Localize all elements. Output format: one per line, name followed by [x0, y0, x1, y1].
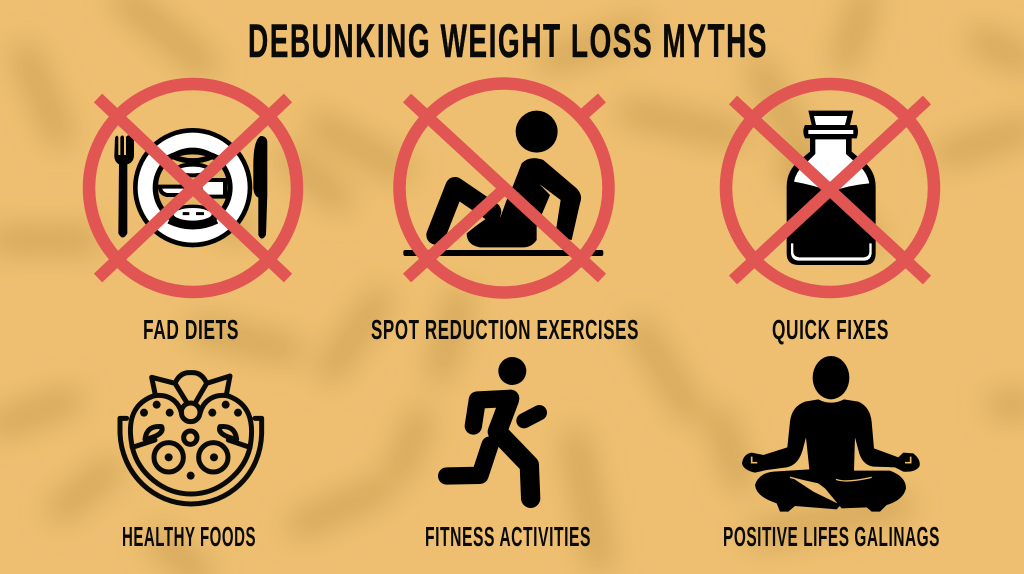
label: fitness activities: FITNESS ACTIVITIES [425, 521, 591, 552]
panel: positive lifestyle [723, 356, 940, 552]
panel: fitness activities [425, 357, 591, 552]
icon: running person [447, 357, 539, 498]
label: healthy foods: HEALTHY FOODS [122, 521, 256, 552]
icon: meditating person [742, 356, 920, 512]
icon: food bowl [120, 373, 262, 504]
icon: bottle [787, 111, 876, 265]
label: quick fixes: QUICK FIXES [772, 314, 889, 345]
icon: red prohibition cross [400, 84, 608, 292]
icon: plate with cutlery [114, 130, 267, 245]
icon: red prohibition cross [726, 84, 934, 292]
label: fad diets: FAD DIETS [143, 314, 239, 345]
panel: healthy foods [120, 373, 262, 552]
icon: seated person [403, 111, 603, 256]
panel: fad diets [89, 84, 297, 345]
panel: spot reduction exercises [371, 84, 639, 345]
panel: quick fixes [726, 84, 934, 345]
label: spot reduction: SPOT REDUCTION EXERCISES [371, 314, 639, 345]
icon: red prohibition cross [89, 84, 297, 292]
